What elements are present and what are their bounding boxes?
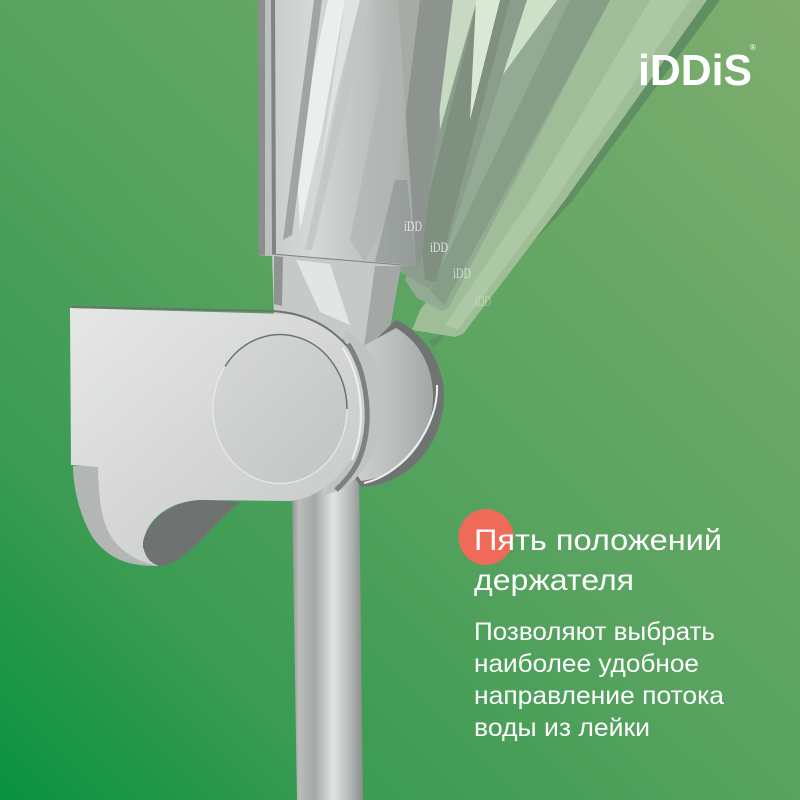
top edge highlight [72, 307, 352, 352]
wall mount disc [350, 320, 444, 487]
ghost logos [404, 219, 491, 310]
shower head collar [272, 254, 401, 400]
logo: iddis: ® [750, 43, 756, 52]
ghost logos: iDD [430, 240, 448, 256]
description: направление потока [474, 682, 724, 710]
ghost position 1 [393, 0, 453, 269]
holder body [70, 307, 369, 566]
logo: iddis: iDDiS [638, 46, 752, 95]
ghost logos: iDD [475, 294, 491, 310]
inner dark hook cavity [143, 500, 240, 566]
grey hook side [73, 466, 158, 566]
hose [292, 470, 363, 800]
heading: держателя [474, 564, 634, 597]
button cap [213, 334, 347, 484]
ghost logos: iDD [404, 219, 422, 235]
description: наиболее удобное [474, 650, 699, 678]
ghost logos: iDD [453, 266, 471, 282]
heading: Пять положений [474, 524, 722, 557]
description [474, 618, 724, 742]
bevel dark edge [336, 344, 367, 490]
heading [474, 524, 722, 597]
red accent circle [458, 509, 514, 565]
ghost position 3 [405, 0, 610, 311]
shower head main [258, 0, 420, 267]
description: воды из лейки [474, 714, 650, 742]
chrome plate [70, 308, 369, 566]
description: Позволяют выбрать [474, 618, 715, 646]
ghost positions of shower head [393, 0, 720, 348]
ghost position 2 [395, 0, 527, 288]
ghost position 4 [412, 0, 720, 348]
holder neck [325, 330, 384, 495]
